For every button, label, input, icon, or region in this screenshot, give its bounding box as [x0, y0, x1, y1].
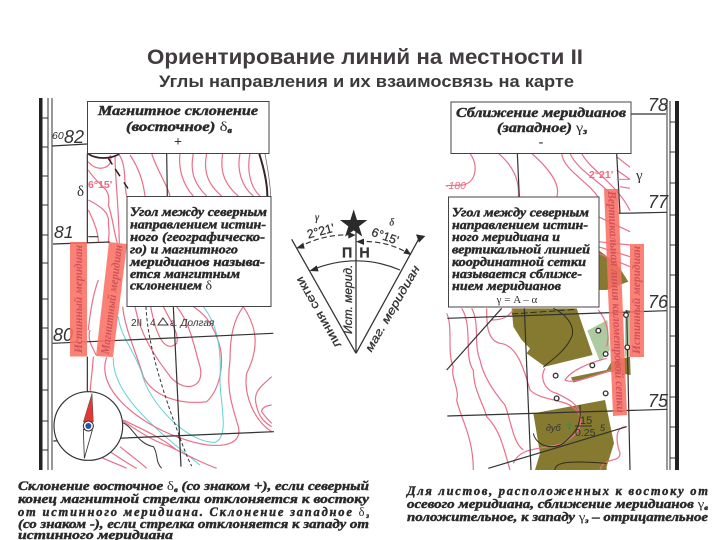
- definition box: magnetic declination: ется мангитным: [130, 267, 240, 281]
- bar: true meridian: Истинный меридиан: [629, 246, 643, 355]
- definition box: convergence: называется сближе-: [452, 267, 582, 281]
- chart: angle diagram: [292, 209, 425, 354]
- panel: right map convergence of meridians: [445, 95, 679, 470]
- angle label 6°15': 6°15': [88, 179, 112, 191]
- text block: declination note: (со знаком +), если северный: [178, 479, 369, 493]
- angle labels: маг. меридиан: [363, 263, 423, 354]
- definition box: convergence: вертикальной линией: [452, 242, 590, 256]
- definition box: magnetic declination: Угол между северным: [130, 205, 267, 219]
- icon: star: [340, 209, 367, 237]
- text block: convergence note: Для листов, расположенных к востоку от: [406, 484, 708, 498]
- definition box: magnetic declination: ного (географическо-: [130, 230, 265, 244]
- bar: vertical grid line: Вертикальная линия километровой сетки: [605, 190, 628, 413]
- definition box: convergence: γ = A – α: [496, 294, 538, 306]
- angle labels: Н: [359, 246, 370, 262]
- text block: declination note: (со знаком -), если стрелка отклоняется к западу от: [18, 517, 369, 531]
- delta mark: δ: [77, 184, 84, 200]
- olive and green terrain patches: [512, 308, 631, 470]
- text block: convergence note: положительное, к западу γ: [407, 510, 584, 524]
- grid labels: 60: [52, 130, 64, 142]
- definition box: convergence: направлением истин-: [452, 218, 588, 232]
- text block: convergence note: в: [704, 504, 708, 512]
- right scale frame: [667, 101, 679, 470]
- angle labels: 2°21': [305, 221, 336, 242]
- subtitle: Углы направления и их взаимосвязь на карте: [159, 73, 574, 91]
- heading box: magnetic declination: (восточное) δ: [126, 119, 226, 134]
- grid labels: 78: [648, 95, 668, 115]
- forest label: [546, 415, 606, 439]
- text block: declination note: конец магнитной стрелки отклоняется к востоку: [18, 492, 370, 506]
- definition box: convergence: ного меридиана и: [452, 230, 560, 244]
- bar: magnetic meridian: Магнитный меридиан: [98, 244, 125, 356]
- angle labels: 6°15': [370, 225, 401, 248]
- left scale frame: [39, 98, 52, 470]
- definition box: magnetic declination: [127, 196, 271, 306]
- forest label: 5: [600, 423, 606, 433]
- angle label 2°21': 2°21': [589, 169, 613, 181]
- heading box: magnetic declination: Магнитное склонение: [97, 103, 258, 118]
- heading box: convergence: -: [539, 135, 544, 150]
- forest label: дуб: [546, 423, 562, 433]
- text block: convergence note: [406, 484, 709, 525]
- arrowhead: magnetic north: [416, 234, 425, 243]
- grid labels: 76: [648, 292, 669, 312]
- upper contours: [87, 153, 271, 243]
- heading box: magnetic declination: +: [174, 135, 182, 150]
- angle labels: [293, 213, 423, 354]
- text block: convergence note: осевого меридиана, сближение меридианов γ: [407, 497, 703, 511]
- contour label -180: -180: [445, 180, 466, 192]
- grid labels: [648, 95, 669, 411]
- arrowheads: [296, 232, 411, 271]
- text block: declination note: [18, 479, 370, 540]
- angle labels: П: [342, 246, 352, 262]
- forest label: 0.25: [575, 427, 596, 439]
- definition box: convergence: координатной сетки: [452, 255, 586, 269]
- dashed arcs: [298, 235, 409, 270]
- bar: true meridian: Истинный меридиан: [71, 245, 85, 354]
- title: Ориентирование линий на местности II: [147, 46, 583, 69]
- definition box: convergence: Угол между северным: [452, 206, 589, 220]
- text block: declination note: Склонение восточное δ: [18, 479, 173, 493]
- lower contours and grid: [53, 280, 274, 468]
- grid labels: 81: [54, 222, 73, 242]
- icon: compass: [54, 392, 123, 460]
- heading box: magnetic declination: [88, 102, 269, 154]
- heading box: convergence: (западное) γ: [497, 120, 582, 135]
- definition box: magnetic declination: го) и магнитного: [130, 242, 238, 256]
- grid labels: 80: [53, 325, 73, 345]
- text block: convergence note: – отрицательное: [589, 510, 709, 524]
- heading box: convergence: з: [582, 127, 587, 136]
- angle labels: γ: [315, 213, 320, 224]
- upper contours: [446, 114, 667, 290]
- lower contours and grid: [447, 308, 667, 470]
- mountain label: 4: [150, 318, 156, 329]
- text block: declination note: з: [365, 512, 369, 520]
- gamma mark: γ: [635, 168, 643, 184]
- mountain label: 2II: [131, 318, 142, 329]
- definition box: magnetic declination: склонением δ: [130, 278, 212, 292]
- grid labels: 82: [64, 127, 84, 147]
- grid labels: 77: [648, 192, 669, 212]
- definition box: magnetic declination: направлением истин-: [130, 218, 266, 232]
- definition box: convergence: нием меридианов: [452, 279, 561, 293]
- angle labels: линия сетки: [293, 274, 344, 350]
- mountain label: г. Долгая: [170, 318, 215, 329]
- angle labels: δ: [389, 217, 394, 228]
- panel: left map magnetic declination: [39, 98, 274, 470]
- text block: convergence note: з: [584, 517, 589, 525]
- heading box: convergence: Сближение меридианов: [456, 105, 626, 120]
- definition box: convergence: [448, 197, 599, 307]
- meridian lines: [292, 222, 420, 353]
- heading box: magnetic declination: в: [228, 126, 233, 135]
- heading box: convergence: [451, 102, 631, 154]
- forest label: 15: [580, 415, 592, 427]
- text block: declination note: от истинного меридиана. Склонение западное δ: [18, 505, 364, 519]
- grid labels: [52, 127, 110, 345]
- grid labels: 75: [648, 391, 669, 411]
- text block: declination note: в: [174, 486, 178, 494]
- definition box: magnetic declination: меридианов называ-: [129, 255, 265, 269]
- mountain label: [131, 318, 215, 329]
- angle labels: Ист. мерид.: [342, 265, 355, 334]
